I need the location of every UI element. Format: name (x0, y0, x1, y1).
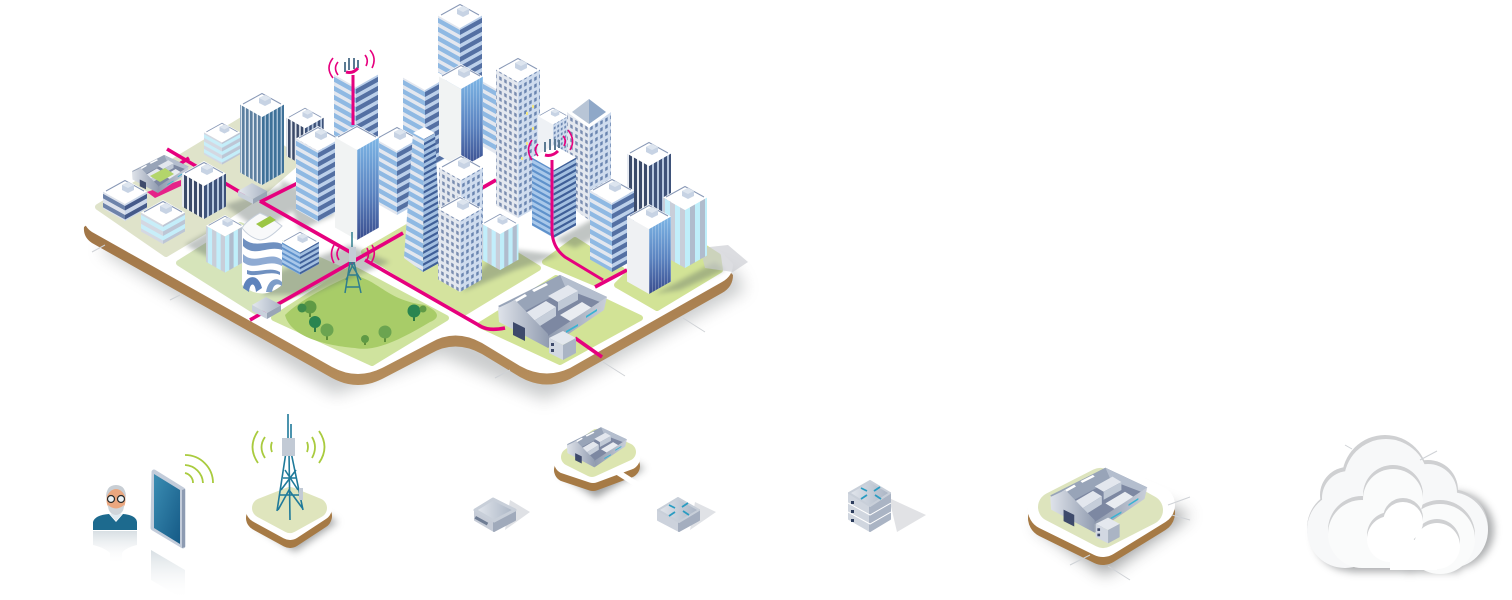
building ground shadows (185, 180, 725, 295)
signal waves (252, 431, 324, 463)
wifi waves (185, 455, 213, 483)
stripe tower (403, 65, 447, 170)
white blue tower (335, 125, 379, 240)
dark back block (286, 107, 324, 166)
pink fibre network lines (167, 149, 627, 357)
pale block (141, 200, 185, 244)
small warehouse island (558, 427, 645, 498)
antenna tower right (532, 145, 576, 238)
head (106, 488, 126, 512)
antenna tower left (334, 62, 378, 152)
cloud (1307, 435, 1494, 574)
node box (238, 183, 267, 204)
platform drop shadow (100, 120, 745, 400)
front right buildings (438, 178, 707, 294)
fibre stub (612, 469, 640, 486)
stripe tower (590, 178, 634, 272)
faint construction lines around the icons (92, 245, 1437, 580)
warehouse (1050, 468, 1147, 533)
tower (438, 3, 482, 103)
dark block (182, 161, 226, 219)
box shadow (505, 500, 530, 530)
shadow wedge past the platform (700, 245, 748, 272)
platform brown side (84, 71, 733, 385)
white grid tower (627, 204, 671, 294)
router arrows (669, 503, 689, 516)
pale vertical tower (206, 215, 244, 273)
stripe block (103, 179, 147, 221)
main illustration: isometric city (84, 3, 748, 400)
stripe block (281, 231, 319, 275)
platform top surface (84, 60, 733, 374)
park lattice tower with signal (332, 232, 374, 293)
tapered skyscraper (404, 127, 441, 272)
reflection (93, 531, 137, 565)
antenna line and signal left (329, 50, 374, 125)
router box (658, 498, 716, 531)
pale tower (663, 185, 707, 268)
user icon (93, 485, 137, 565)
gateway box (475, 499, 530, 531)
pale block (204, 122, 240, 165)
annex (1096, 518, 1120, 543)
stripe tower (296, 126, 340, 222)
pale block (482, 213, 518, 270)
small building (538, 107, 568, 170)
window block (439, 155, 483, 240)
reflection (151, 550, 185, 600)
island base (259, 498, 319, 535)
steel tower (240, 92, 284, 185)
body (153, 472, 183, 546)
white blue tower (439, 64, 483, 168)
cloud shadow (1314, 492, 1494, 573)
window tower (496, 57, 540, 218)
trees (298, 300, 426, 345)
screen (154, 474, 180, 544)
lattice tower (277, 414, 303, 520)
core router stack (848, 481, 926, 532)
front layer (1367, 498, 1460, 565)
back buildings (204, 3, 671, 272)
stripe tower behind (481, 80, 525, 158)
antenna line and signal right (528, 130, 603, 280)
ground lots (98, 120, 720, 362)
smartphone icon (151, 455, 213, 600)
pyramid roof tower (567, 98, 611, 220)
dark tower (627, 141, 671, 225)
cell tower island (252, 414, 338, 552)
body (93, 514, 137, 530)
stripe tower (375, 126, 419, 215)
node box (252, 297, 281, 319)
back layer (1307, 435, 1488, 566)
warehouse annex (549, 331, 576, 360)
large warehouse (498, 275, 607, 348)
small warehouse left (132, 155, 189, 198)
middle layer (1328, 465, 1475, 570)
curved white tower (242, 213, 282, 294)
front left buildings (103, 161, 319, 319)
island shadow (255, 500, 338, 552)
router arrows (861, 487, 881, 499)
warehouse (567, 427, 627, 467)
window tower front (438, 196, 482, 292)
park (274, 268, 446, 363)
data centre island (1035, 468, 1190, 575)
